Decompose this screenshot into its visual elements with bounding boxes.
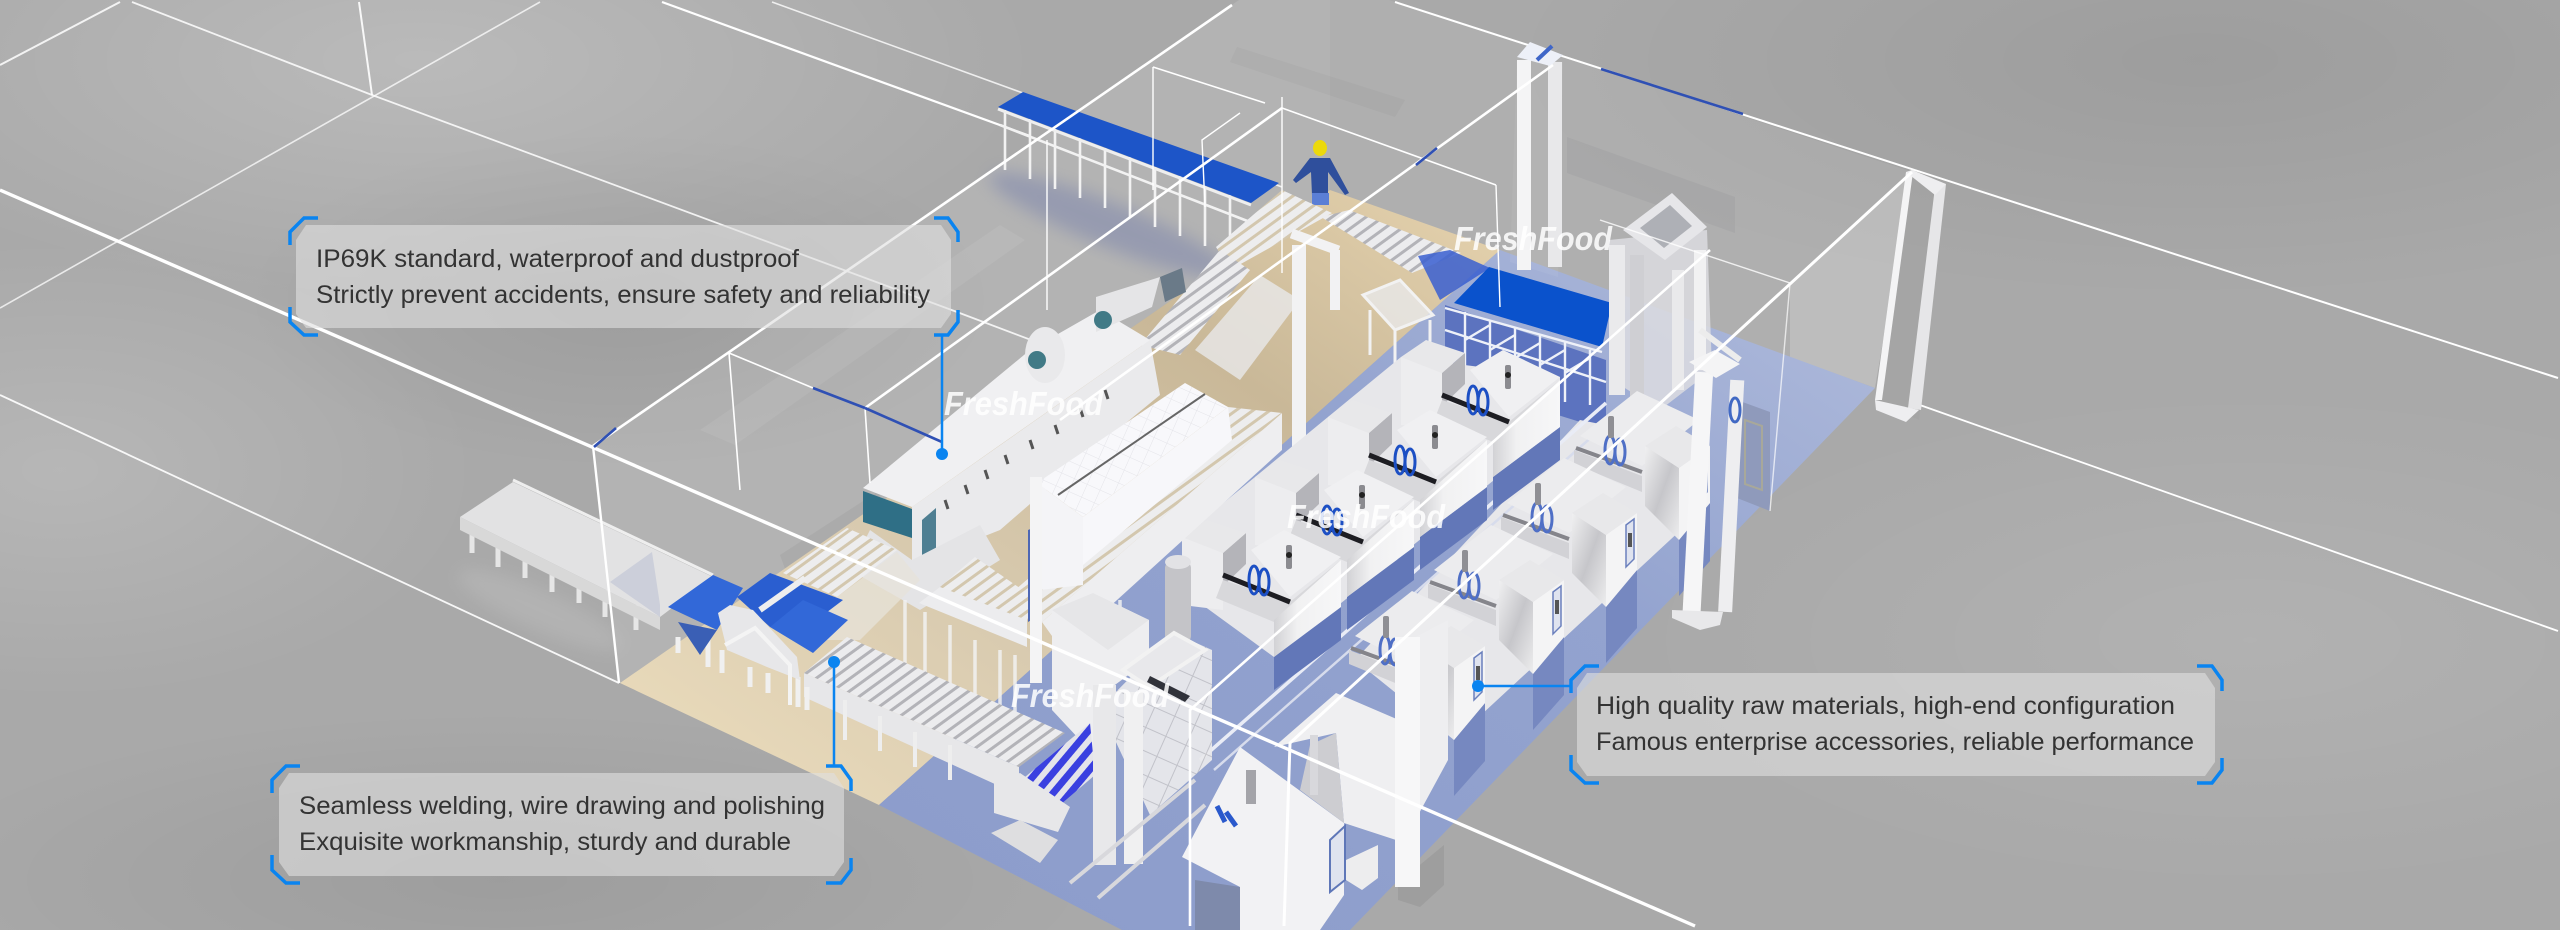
feed machine with blue belts bbox=[668, 573, 848, 710]
mid white cabinet bbox=[1052, 593, 1149, 770]
callout brackets bbox=[1571, 666, 2222, 783]
callout text: Seamless welding, wire drawing and polishing bbox=[299, 792, 825, 820]
watermark: FreshFood lower: FreshFood bbox=[1011, 677, 1170, 714]
callout brackets bbox=[290, 218, 958, 335]
callout text: Famous enterprise accessories, reliable performance bbox=[1596, 728, 2194, 756]
watermark: FreshFood upper: FreshFood bbox=[1454, 220, 1613, 257]
worker bbox=[1293, 140, 1349, 205]
front large cabinets bbox=[1182, 693, 1406, 930]
glass walls bbox=[593, 0, 1912, 683]
unit A3 bbox=[1255, 460, 1414, 630]
callout text: IP69K standard, waterproof and dustproof bbox=[316, 245, 799, 273]
fan 1 bbox=[1094, 277, 1160, 332]
machine row A bbox=[1182, 340, 1560, 690]
callout text bbox=[299, 792, 825, 856]
front white column group bbox=[1395, 620, 1448, 907]
unit A2 bbox=[1328, 400, 1487, 570]
room frame lines bbox=[0, 5, 1912, 926]
front lift machine bbox=[1070, 633, 1212, 898]
callout panel bbox=[1577, 673, 2215, 776]
callout leader bbox=[936, 335, 948, 460]
watermark: FreshFood: FreshFood bbox=[944, 385, 1104, 422]
callout panel bbox=[296, 225, 951, 328]
callout text: High quality raw materials, high-end configuration bbox=[1596, 692, 2175, 720]
callout: IP69K safety bbox=[290, 218, 958, 460]
right back tower bbox=[1510, 42, 1563, 277]
upper roller conveyors bbox=[1140, 190, 1490, 380]
white modular belt block bbox=[1037, 383, 1232, 590]
white post bbox=[1290, 229, 1340, 455]
callout leader bbox=[828, 656, 840, 766]
callout text: Exquisite workmanship, sturdy and durable bbox=[299, 828, 791, 856]
unit A1 bbox=[1401, 340, 1560, 510]
callout panel bbox=[279, 773, 844, 876]
door on back wall bbox=[1737, 400, 1770, 511]
unit B1 bbox=[1574, 391, 1710, 596]
unit B3 bbox=[1428, 525, 1564, 730]
blue separating strip bbox=[1028, 525, 1040, 622]
callout: raw materials bbox=[1472, 666, 2222, 783]
callout text bbox=[1596, 692, 2194, 756]
unit A4 bbox=[1182, 520, 1341, 690]
ground grid lines bbox=[0, 2, 2558, 683]
far right corner tower bbox=[1875, 170, 1946, 422]
mid right tower bbox=[1672, 350, 1744, 630]
second blue conveyor bbox=[1445, 267, 1612, 430]
unit B2 bbox=[1501, 458, 1637, 663]
floor: beige zone bbox=[620, 190, 1500, 805]
floor: blue zone bbox=[879, 250, 1875, 930]
front tray box bbox=[991, 773, 1070, 863]
steel tank bbox=[1165, 555, 1191, 642]
vertical post bbox=[1030, 477, 1042, 683]
back lift machine bbox=[1609, 193, 1740, 410]
callout leader bbox=[1472, 680, 1571, 692]
callout: welding bbox=[272, 656, 851, 883]
front blue roller section bbox=[1025, 723, 1095, 805]
conveyor support legs bbox=[905, 600, 1120, 725]
washing tunnel bbox=[850, 268, 1186, 610]
top blue conveyor bbox=[981, 92, 1279, 294]
inspection bench bbox=[1363, 280, 1433, 375]
machine row B bbox=[1349, 391, 1710, 796]
row B white base bbox=[1355, 420, 1710, 740]
centre right roller conveyor bbox=[1015, 407, 1282, 650]
callout text: Strictly prevent accidents, ensure safety and reliability bbox=[316, 281, 931, 309]
centre lower roller conveyor bbox=[919, 557, 1037, 647]
left roller conveyor bbox=[783, 528, 920, 640]
watermark: FreshFood middle: FreshFood bbox=[1287, 498, 1446, 535]
callout text bbox=[316, 245, 931, 309]
fan 2 bbox=[1025, 327, 1065, 383]
row B rail bbox=[1200, 403, 1620, 770]
blue accent edges bbox=[594, 69, 1743, 447]
front roller conveyor bbox=[804, 637, 1065, 795]
row A white base bbox=[1182, 357, 1560, 657]
left infeed conveyor bbox=[450, 480, 713, 665]
unit B4 bbox=[1349, 591, 1485, 796]
callout brackets bbox=[272, 766, 851, 883]
